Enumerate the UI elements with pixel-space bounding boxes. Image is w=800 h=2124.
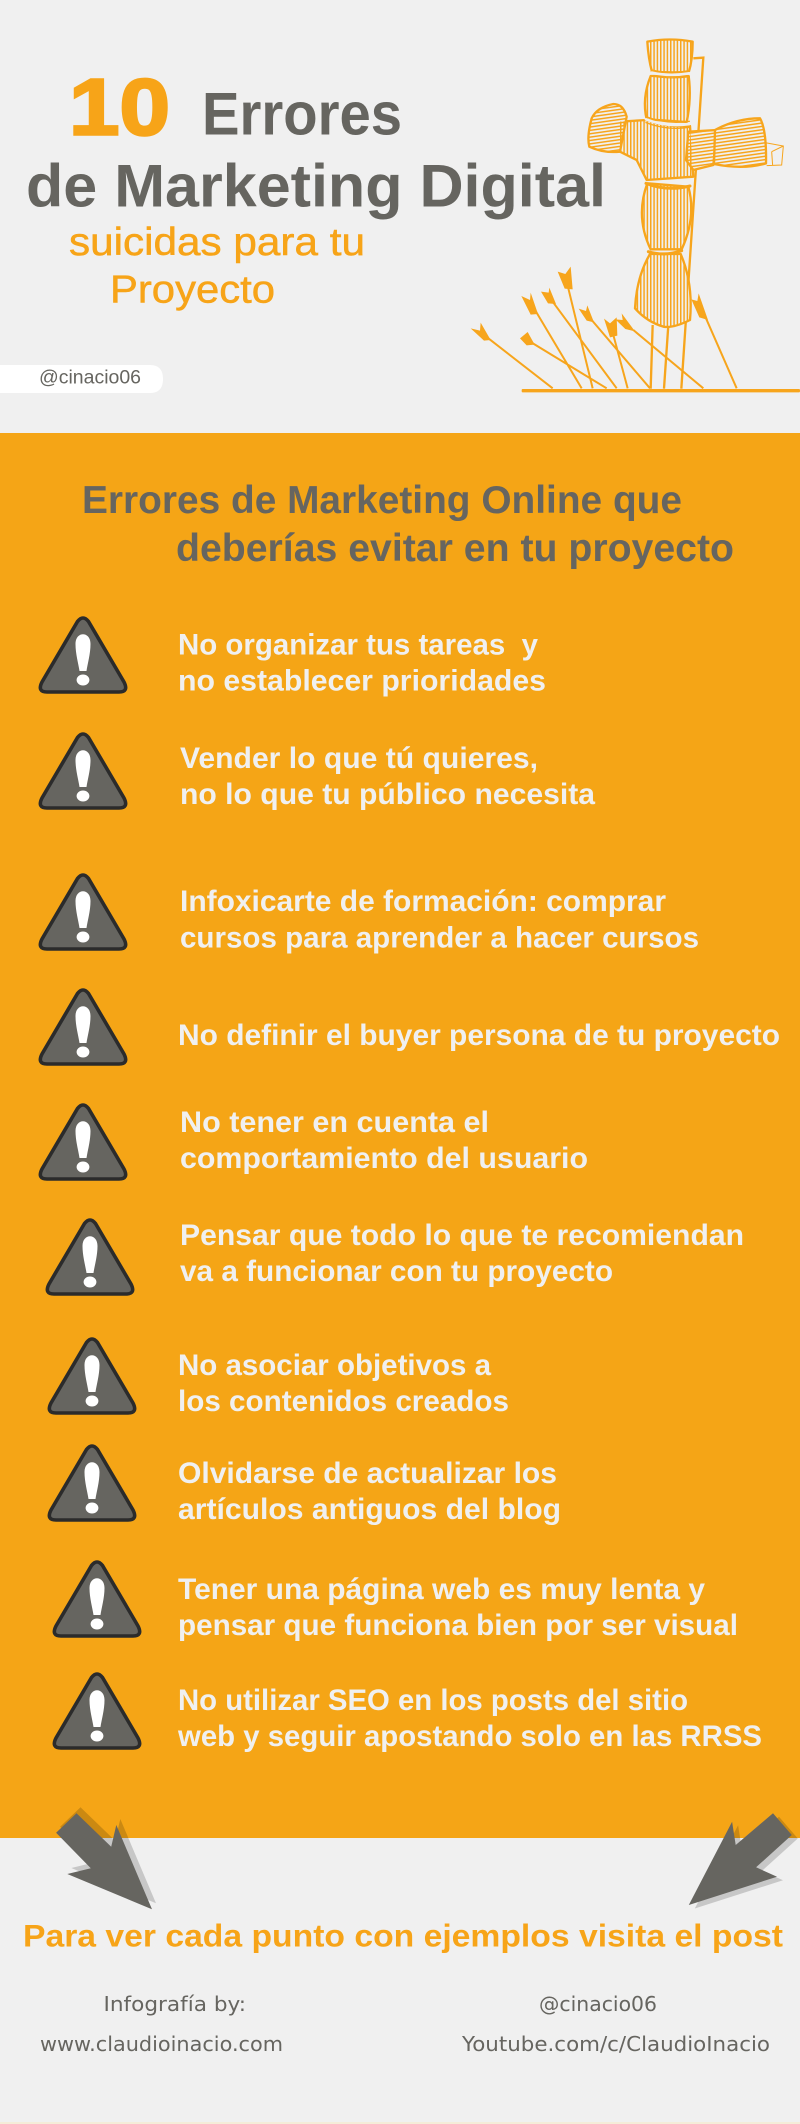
item 10: web y seguir apostando solo en las RRSS (177, 1720, 762, 1753)
item 2: Vender lo que tú quieres, (180, 742, 538, 775)
handle pill: @cinacio06 (39, 368, 141, 388)
item 5 (40, 1105, 588, 1179)
ground line (522, 389, 800, 392)
credits left: Infografía by: (104, 1992, 246, 2016)
straw texture (588, 39, 766, 327)
item 4 (40, 990, 780, 1064)
straw bindings (646, 70, 690, 254)
item 8: Olvidarse de actualizar los (178, 1457, 557, 1490)
arrow: right pointing down-left (689, 1813, 798, 1908)
section heading (82, 479, 734, 570)
item 2: no lo que tu público necesita (180, 778, 595, 811)
item 9 (54, 1562, 738, 1642)
item 10: No utilizar SEO en los posts del sitio (178, 1684, 688, 1717)
item 1: No organizar tus tareas y (178, 628, 538, 662)
item 7: los contenidos creados (178, 1385, 509, 1418)
item 5: comportamiento del usuario (180, 1142, 588, 1175)
item 2 (40, 734, 595, 811)
arrows stuck in ground (488, 288, 737, 388)
title: Errores: Errores (202, 80, 402, 148)
item 1 (40, 618, 546, 698)
section heading: Errores de Marketing Online que (82, 479, 682, 522)
item 4: No definir el buyer persona de tu proyecto (178, 1019, 780, 1052)
arrow fletchings (471, 267, 708, 345)
illustration: straw figure with arrows (471, 39, 800, 392)
item 7 (49, 1339, 509, 1418)
subtitle line 1: suicidas para tu (69, 221, 365, 264)
item 8: artículos antiguos del blog (178, 1493, 561, 1526)
straw bundles (588, 39, 766, 327)
subtitle line 2: Proyecto (110, 268, 275, 312)
credits left (40, 1992, 283, 2056)
title: de Marketing Digital: de Marketing Digital (26, 152, 606, 220)
item 3 (40, 875, 699, 954)
handle pill (0, 365, 163, 393)
item 5: No tener en cuenta el (180, 1106, 489, 1139)
arrow: left pointing down-right (56, 1807, 156, 1909)
item 3: Infoxicarte de formación: comprar (180, 885, 666, 918)
title number 10: 10 (69, 62, 170, 152)
item 8 (49, 1446, 561, 1526)
credits right: Youtube.com/c/ClaudioInacio (461, 2032, 770, 2056)
item 10 (54, 1674, 762, 1753)
item 6: Pensar que todo lo que te recomiendan (180, 1219, 744, 1252)
wooden post (651, 58, 703, 389)
item 9: Tener una página web es muy lenta y (178, 1573, 705, 1606)
section heading: deberías evitar en tu proyecto (176, 527, 734, 570)
item 9: pensar que funciona bien por ser visual (178, 1609, 738, 1642)
call to action: Para ver cada punto con ejemplos visita el post (23, 1918, 784, 1954)
credits left: www.claudioinacio.com (40, 2032, 283, 2056)
item 3: cursos para aprender a hacer cursos (180, 922, 699, 954)
item 7: No asociar objetivos a (178, 1349, 491, 1382)
item 1: no establecer prioridades (178, 664, 546, 698)
credits right (461, 1992, 770, 2056)
main orange panel (0, 433, 800, 1838)
item 6: va a funcionar con tu proyecto (180, 1255, 613, 1288)
header panel (0, 39, 800, 393)
item 6 (47, 1219, 744, 1294)
credits right: @cinacio06 (539, 1992, 657, 2016)
